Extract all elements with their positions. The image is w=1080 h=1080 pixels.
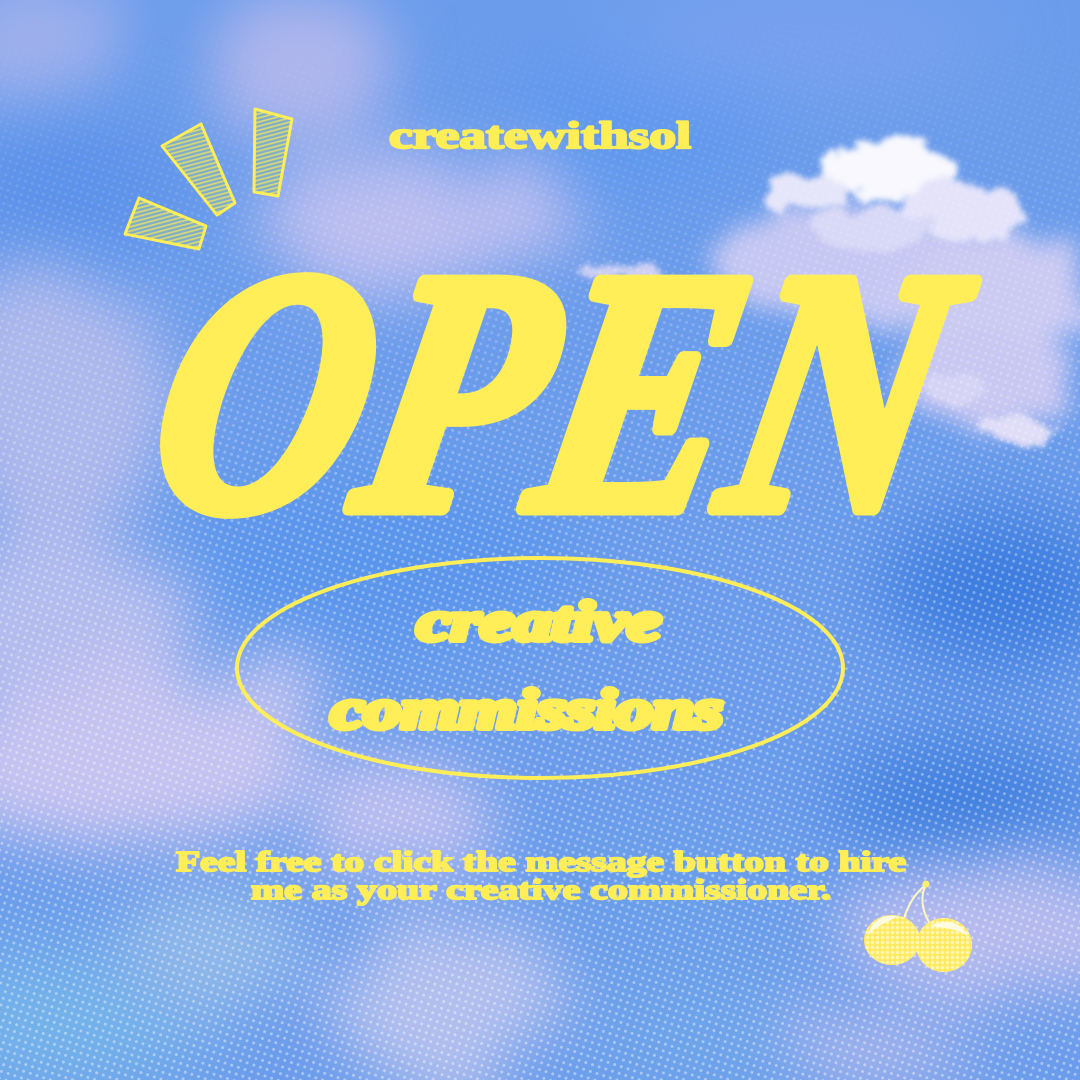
oval badge [237,558,843,778]
burst mark right [254,109,292,196]
message text: me as your creative commissioner. [251,874,831,906]
badge text line two: commissions [331,679,723,741]
oval outline [237,558,843,778]
burst mark middle [162,124,235,215]
message text: Feel free to click the message button to hire [176,846,906,878]
burst mark left [125,198,206,249]
icon: burst marks [125,109,292,249]
icon: cherries [864,880,972,972]
badge text line one: creative [417,591,661,653]
message text [176,846,906,906]
brand name: createwithsol [389,115,691,157]
